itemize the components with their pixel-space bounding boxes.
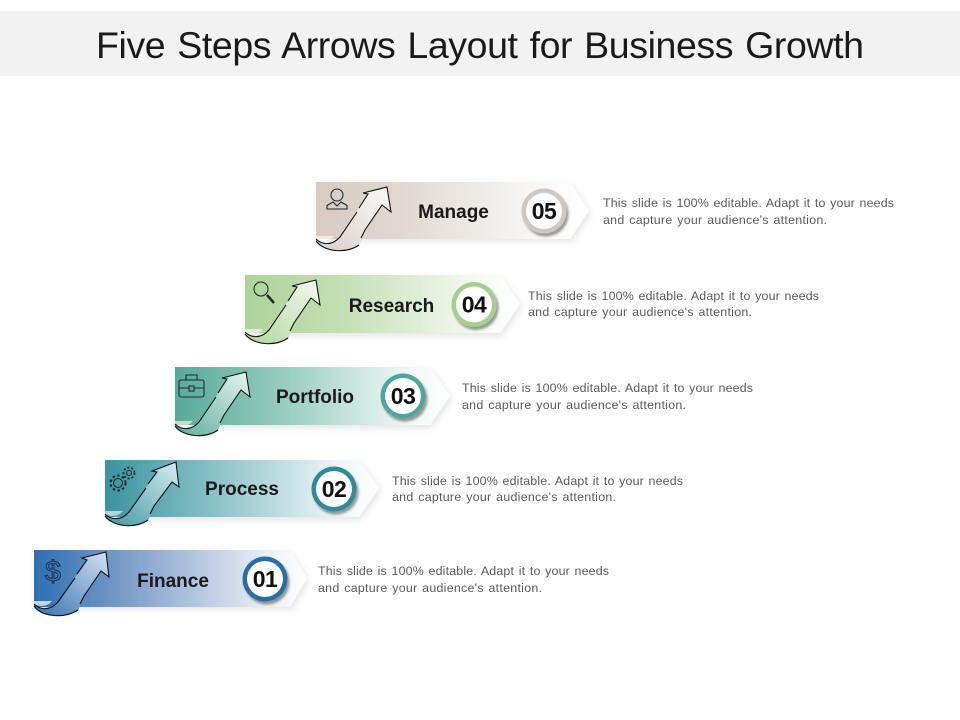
number badge bbox=[312, 466, 356, 512]
banner bbox=[175, 367, 450, 425]
number badge bbox=[242, 556, 288, 602]
arrow bbox=[175, 372, 250, 436]
description 03: This slide is 100% editable. Adapt it to your needs bbox=[462, 381, 753, 395]
label: Research bbox=[349, 296, 434, 317]
description 04 bbox=[528, 289, 819, 319]
icon: gears bbox=[110, 468, 134, 490]
title: Five Steps Arrows Layout for Business Growth bbox=[96, 24, 864, 66]
description 04: This slide is 100% editable. Adapt it to your needs bbox=[528, 289, 819, 303]
description 02 bbox=[392, 474, 683, 504]
number badge: 03 bbox=[391, 383, 415, 409]
step 03: Portfolio bbox=[175, 367, 450, 436]
step 04: Research bbox=[245, 275, 520, 344]
banner bbox=[316, 182, 589, 239]
number badge: 05 bbox=[532, 198, 557, 224]
arrow bbox=[34, 552, 109, 616]
description 03: and capture your audience's attention. bbox=[462, 398, 686, 412]
title bar bbox=[0, 11, 960, 76]
number badge: 02 bbox=[322, 476, 346, 502]
step 02: Process bbox=[105, 460, 379, 526]
label: Portfolio bbox=[276, 387, 354, 408]
icon: magnifier bbox=[254, 282, 274, 303]
number badge bbox=[522, 188, 566, 234]
description 04: and capture your audience's attention. bbox=[528, 305, 752, 319]
banner bbox=[105, 460, 379, 517]
icon: briefcase bbox=[179, 375, 204, 397]
number badge: 04 bbox=[462, 292, 487, 318]
banner bbox=[245, 275, 520, 333]
label: Finance bbox=[137, 571, 209, 592]
label: Manage bbox=[418, 202, 489, 223]
description 05 bbox=[603, 196, 894, 227]
arrow bbox=[316, 187, 391, 251]
label: Process bbox=[205, 479, 279, 500]
banner bbox=[34, 550, 307, 607]
description 01: This slide is 100% editable. Adapt it to your needs bbox=[318, 564, 609, 578]
description 02: This slide is 100% editable. Adapt it to your needs bbox=[392, 474, 683, 488]
step 01: Finance bbox=[34, 550, 307, 616]
description 03 bbox=[462, 381, 753, 412]
number badge: 01 bbox=[253, 566, 278, 592]
description 05: and capture your audience's attention. bbox=[603, 213, 827, 227]
number badge bbox=[452, 282, 496, 327]
description 01 bbox=[318, 564, 609, 595]
icon: person bbox=[327, 189, 347, 209]
number badge bbox=[380, 374, 426, 418]
description 02: and capture your audience's attention. bbox=[392, 490, 616, 504]
arrow bbox=[105, 462, 179, 526]
description 05: This slide is 100% editable. Adapt it to your needs bbox=[603, 196, 894, 210]
description 01: and capture your audience's attention. bbox=[318, 581, 542, 595]
arrow bbox=[245, 280, 320, 344]
icon: dollar sign: $ bbox=[45, 556, 61, 588]
step 05: Manage bbox=[316, 182, 589, 251]
